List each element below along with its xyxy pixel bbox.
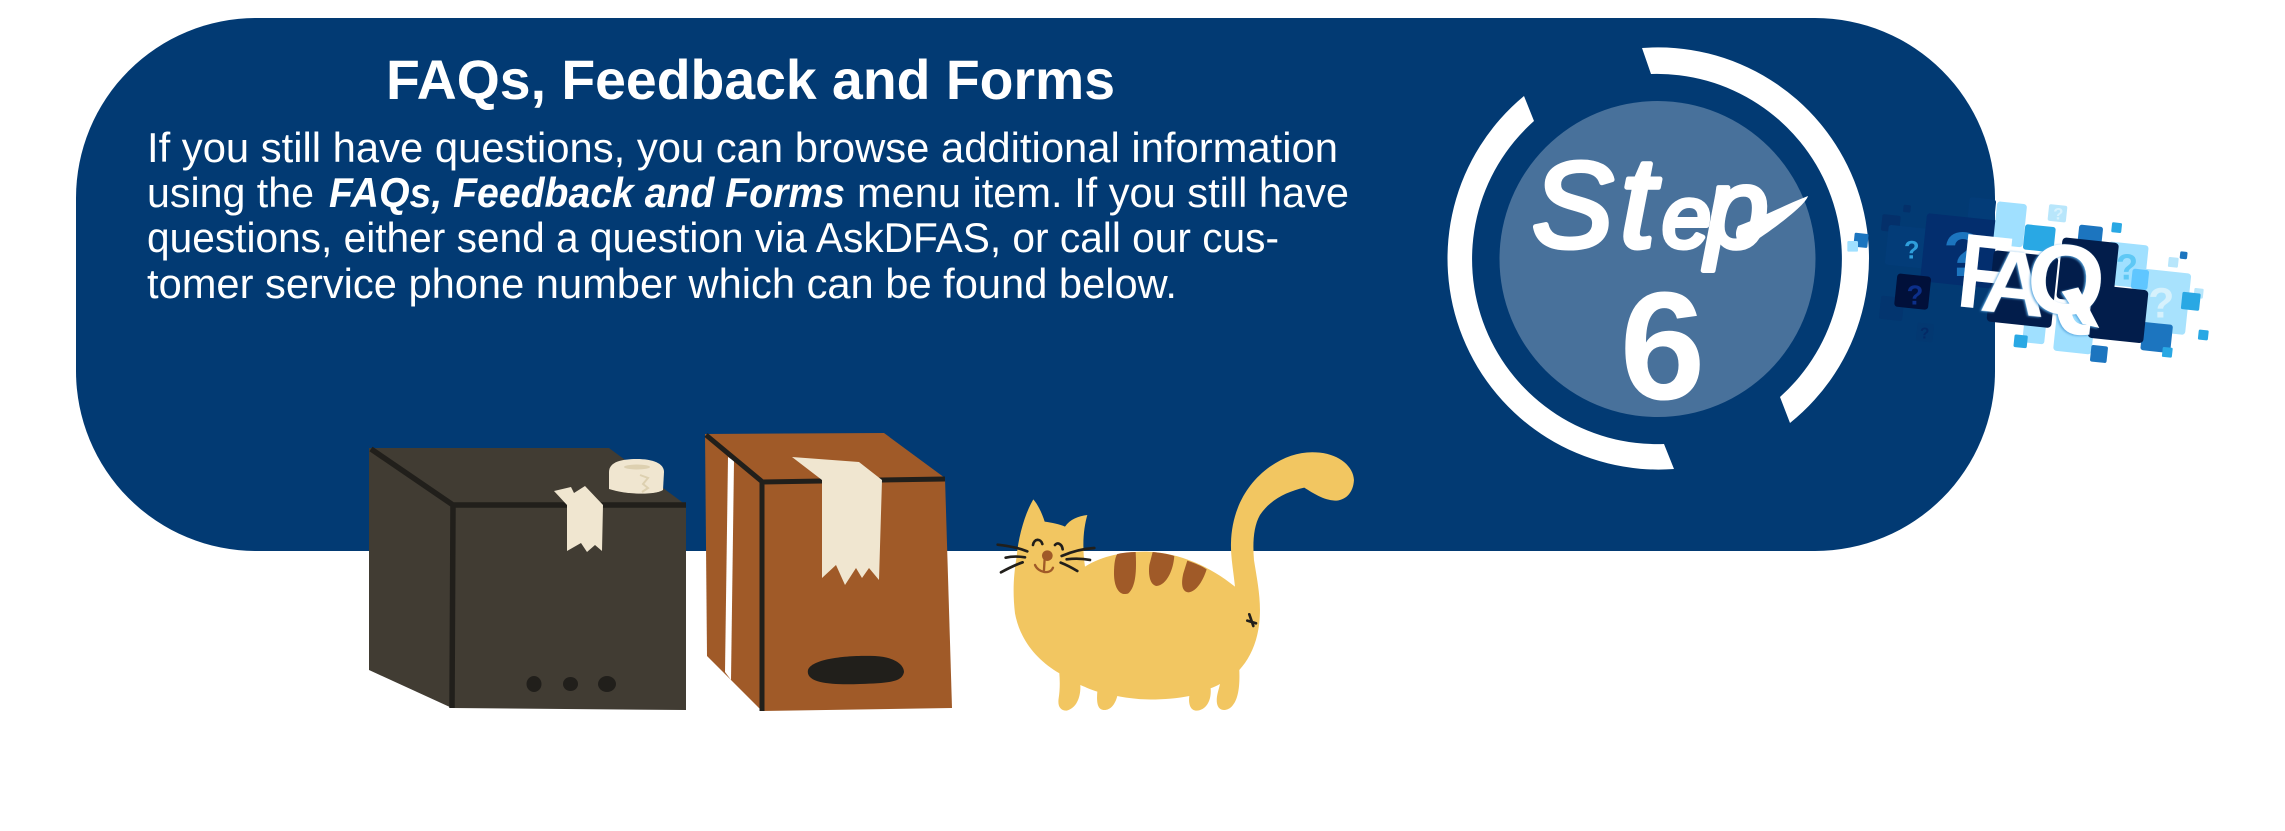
FAQ letters: A (1977, 231, 2052, 337)
dark box edges (371, 449, 686, 708)
dark box body (369, 448, 686, 710)
blue squares (2023, 224, 2056, 253)
question marks over white: ? (2053, 204, 2063, 223)
cat face (998, 540, 1256, 626)
step word: e (1662, 167, 1711, 266)
heading: FAQs, Feedback and Forms (386, 48, 1115, 111)
text block: instructions (147, 124, 1349, 307)
text block: instructions: tomer service phone number which can be found below. (147, 260, 1177, 307)
question marks over white: ? (2116, 246, 2138, 287)
text block: instructions: menu item. If you still have (857, 169, 1349, 216)
illustration: dark box (369, 448, 686, 710)
tape strip (554, 486, 603, 552)
question marks over panel: ? (1943, 220, 1982, 290)
step word: S (1532, 137, 1613, 273)
light squares (1993, 201, 2027, 247)
icon: FAQ graphic (1847, 197, 2209, 363)
question marks over white (2053, 204, 2174, 327)
small pale square on ring (1847, 241, 1858, 252)
illustration: brown box (705, 433, 952, 711)
cat stripes (1114, 552, 1207, 594)
FAQ letters: F (1953, 210, 2018, 334)
badge ring left arc (1448, 96, 1674, 470)
hand hole (808, 656, 904, 684)
tape roll (609, 459, 664, 494)
question marks over panel (1904, 220, 1982, 343)
text block: instructions: If you still have questions, you can browse additional information (147, 124, 1338, 171)
squares over panel (1881, 214, 1901, 233)
FAQ letters (1953, 210, 2110, 339)
question marks over panel: ? (1907, 280, 1923, 311)
brown box body (705, 433, 952, 711)
text block: instructions: questions, either send a question via AskDFAS, or call our cus- (147, 214, 1279, 261)
badge inner circle (1500, 101, 1816, 417)
FAQ letters: Q (2022, 221, 2110, 339)
text block: instructions: using the (147, 169, 314, 216)
white stripe (725, 457, 734, 680)
badge ring right arc (1642, 47, 1869, 423)
question marks over panel: ? (1920, 326, 1929, 343)
tape strip (792, 457, 882, 585)
step number: 6 (1620, 260, 1705, 432)
step word: t (1620, 132, 1660, 275)
step word swoosh (1736, 196, 1808, 244)
panel: blue rounded background (76, 18, 1995, 551)
step word: p (1703, 146, 1768, 271)
question marks over white: ? (2148, 279, 2174, 327)
air holes (526, 676, 616, 692)
question marks over panel: ? (1904, 237, 1919, 265)
text block: instructions: FAQs, Feedback and Forms (329, 169, 845, 217)
illustration: cat (998, 452, 1354, 711)
cat nose and mouth (1035, 550, 1053, 572)
brown box edges (706, 435, 945, 711)
cat body (1014, 452, 1354, 711)
dark navy cards (1986, 237, 2149, 343)
step badge (1448, 47, 1869, 470)
